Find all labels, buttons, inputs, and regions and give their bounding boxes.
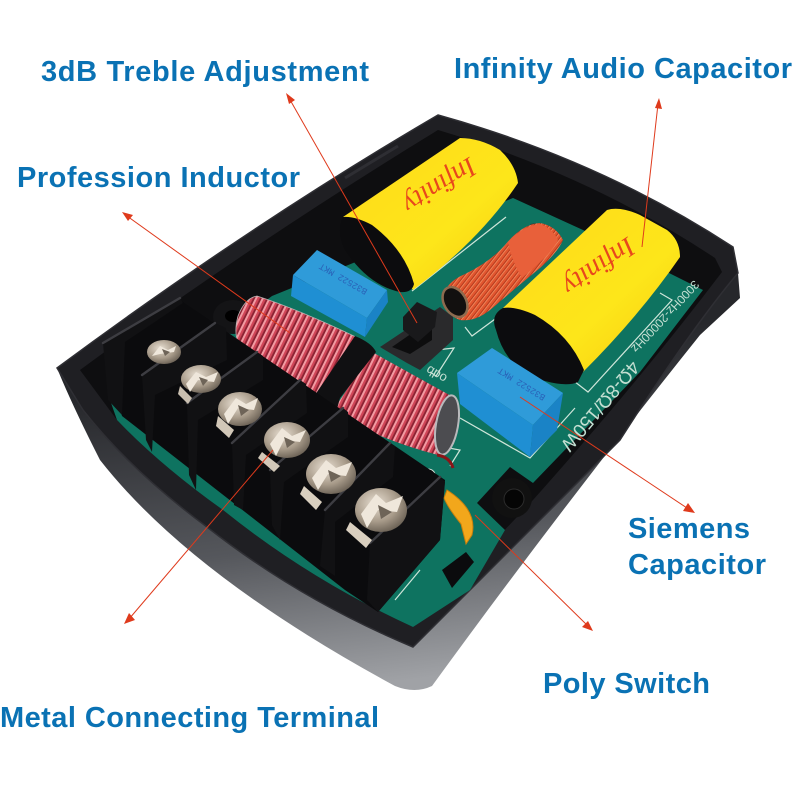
enclosure outer wall <box>57 273 740 690</box>
inductor: small orange <box>437 223 563 321</box>
board hole <box>421 469 435 481</box>
blue cap print: B32522 MKT <box>496 365 548 402</box>
board silkscreen outlines <box>395 217 672 600</box>
slide switch <box>380 302 453 370</box>
enclosure <box>57 115 740 690</box>
right coil <box>332 352 453 455</box>
circuit board: 3000Hz-20000Hz <box>628 278 702 355</box>
circuit board <box>110 198 703 627</box>
side notch <box>442 552 474 588</box>
barrier lips <box>103 298 440 543</box>
circuit board: odb <box>423 363 450 386</box>
brand text: Infinity <box>556 230 642 302</box>
arrow: siemens capacitor <box>520 397 695 513</box>
enclosure interior <box>80 130 722 627</box>
smooth sleeve <box>508 224 558 278</box>
screw 5 <box>300 454 356 510</box>
screw 2 <box>178 365 221 404</box>
label: Infinity Audio Capacitor: Infinity Audio Capacitor <box>454 53 792 85</box>
screw 1 <box>147 340 181 364</box>
mounting post <box>492 478 532 518</box>
core band <box>315 336 376 420</box>
capacitor: yellow left <box>340 138 518 292</box>
screw 4 <box>258 422 310 472</box>
arrow: audio capacitor <box>642 98 662 247</box>
label: Siemens Capacitor: Capacitor <box>628 549 766 581</box>
screw 6 <box>346 488 407 548</box>
enclosure rim <box>57 115 738 647</box>
mounting post left <box>213 300 253 334</box>
poly switch <box>444 490 473 544</box>
board text: 4Ω-8Ω/150W <box>556 356 643 455</box>
capacitor: blue bottom <box>457 348 563 457</box>
brand text: Infinity <box>397 150 483 220</box>
capacitor: blue top <box>291 250 388 337</box>
left coil <box>236 296 358 395</box>
label: Metal Connecting Terminal: Metal Connecting Terminal <box>0 702 379 734</box>
label: Profession Inductor: Profession Inductor <box>17 162 300 194</box>
barriers <box>103 298 445 612</box>
arrow: poly switch <box>475 515 593 631</box>
arrow: terminal <box>124 450 273 624</box>
terminal block <box>103 298 445 612</box>
label: 3dB Treble Adjustment: 3dB Treble Adjustment <box>41 56 369 88</box>
blue cap print: B32522 MKT <box>317 260 370 296</box>
capacitor: yellow right <box>494 209 680 384</box>
lead wire <box>437 455 453 468</box>
screw 3 <box>216 392 262 438</box>
arrow: treble adjustment <box>286 93 417 323</box>
arrow: inductor <box>122 212 290 333</box>
inner ledge <box>345 146 398 178</box>
inductor: large <box>236 296 463 468</box>
label: Poly Switch: Poly Switch <box>543 668 710 700</box>
terminal base <box>105 300 445 612</box>
label: Siemens Capacitor: Siemens <box>628 513 750 545</box>
coil end cap <box>431 394 463 456</box>
